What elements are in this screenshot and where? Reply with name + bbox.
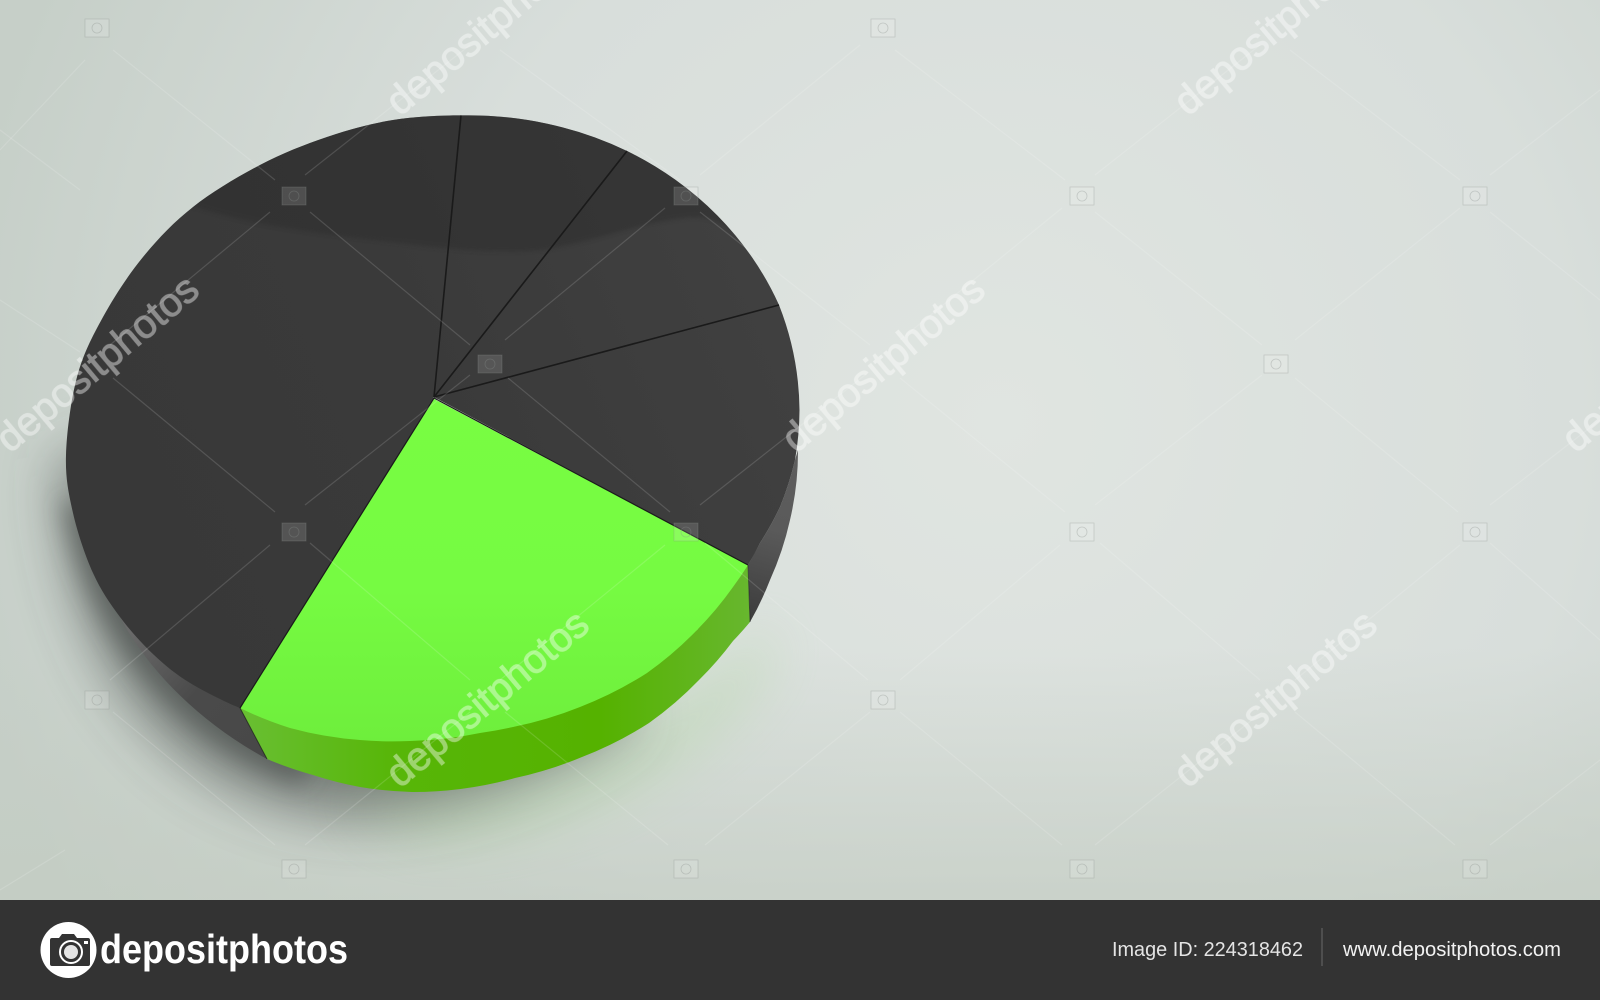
- slice: largest black sector: [66, 115, 461, 708]
- watermark: repeated depositphotos text: depositphotos: [774, 266, 993, 461]
- side wall: right black sector: [748, 450, 798, 622]
- watermark: repeated depositphotos text: depositphotos: [1166, 601, 1385, 796]
- footer bar: [0, 900, 1600, 1000]
- slice: right black sector: [434, 305, 800, 565]
- watermark: repeated depositphotos text: [0, 0, 1600, 796]
- icon: camera badge: [40, 922, 96, 978]
- drop shadow of the pie: [60, 400, 773, 835]
- watermark: repeated depositphotos text: depositphotos: [378, 601, 597, 796]
- watermark: camera icons: [85, 19, 1487, 878]
- slice: upper right black sector: [434, 151, 779, 397]
- glossy reflection band: [194, 115, 730, 250]
- website url: www.depositphotos.com: [1342, 939, 1561, 961]
- image id: Image ID: 224318462: [1112, 939, 1303, 961]
- slice divider lines: [240, 115, 779, 759]
- logo wordmark: depositphotos: [100, 926, 348, 972]
- side wall: left black sector: [120, 617, 267, 759]
- slice: highlighted green sector: [240, 399, 748, 741]
- footer logo: [40, 922, 348, 978]
- side wall: green sector: [240, 565, 750, 792]
- slice: narrow top black sector: [434, 115, 627, 397]
- pie chart: [66, 90, 800, 792]
